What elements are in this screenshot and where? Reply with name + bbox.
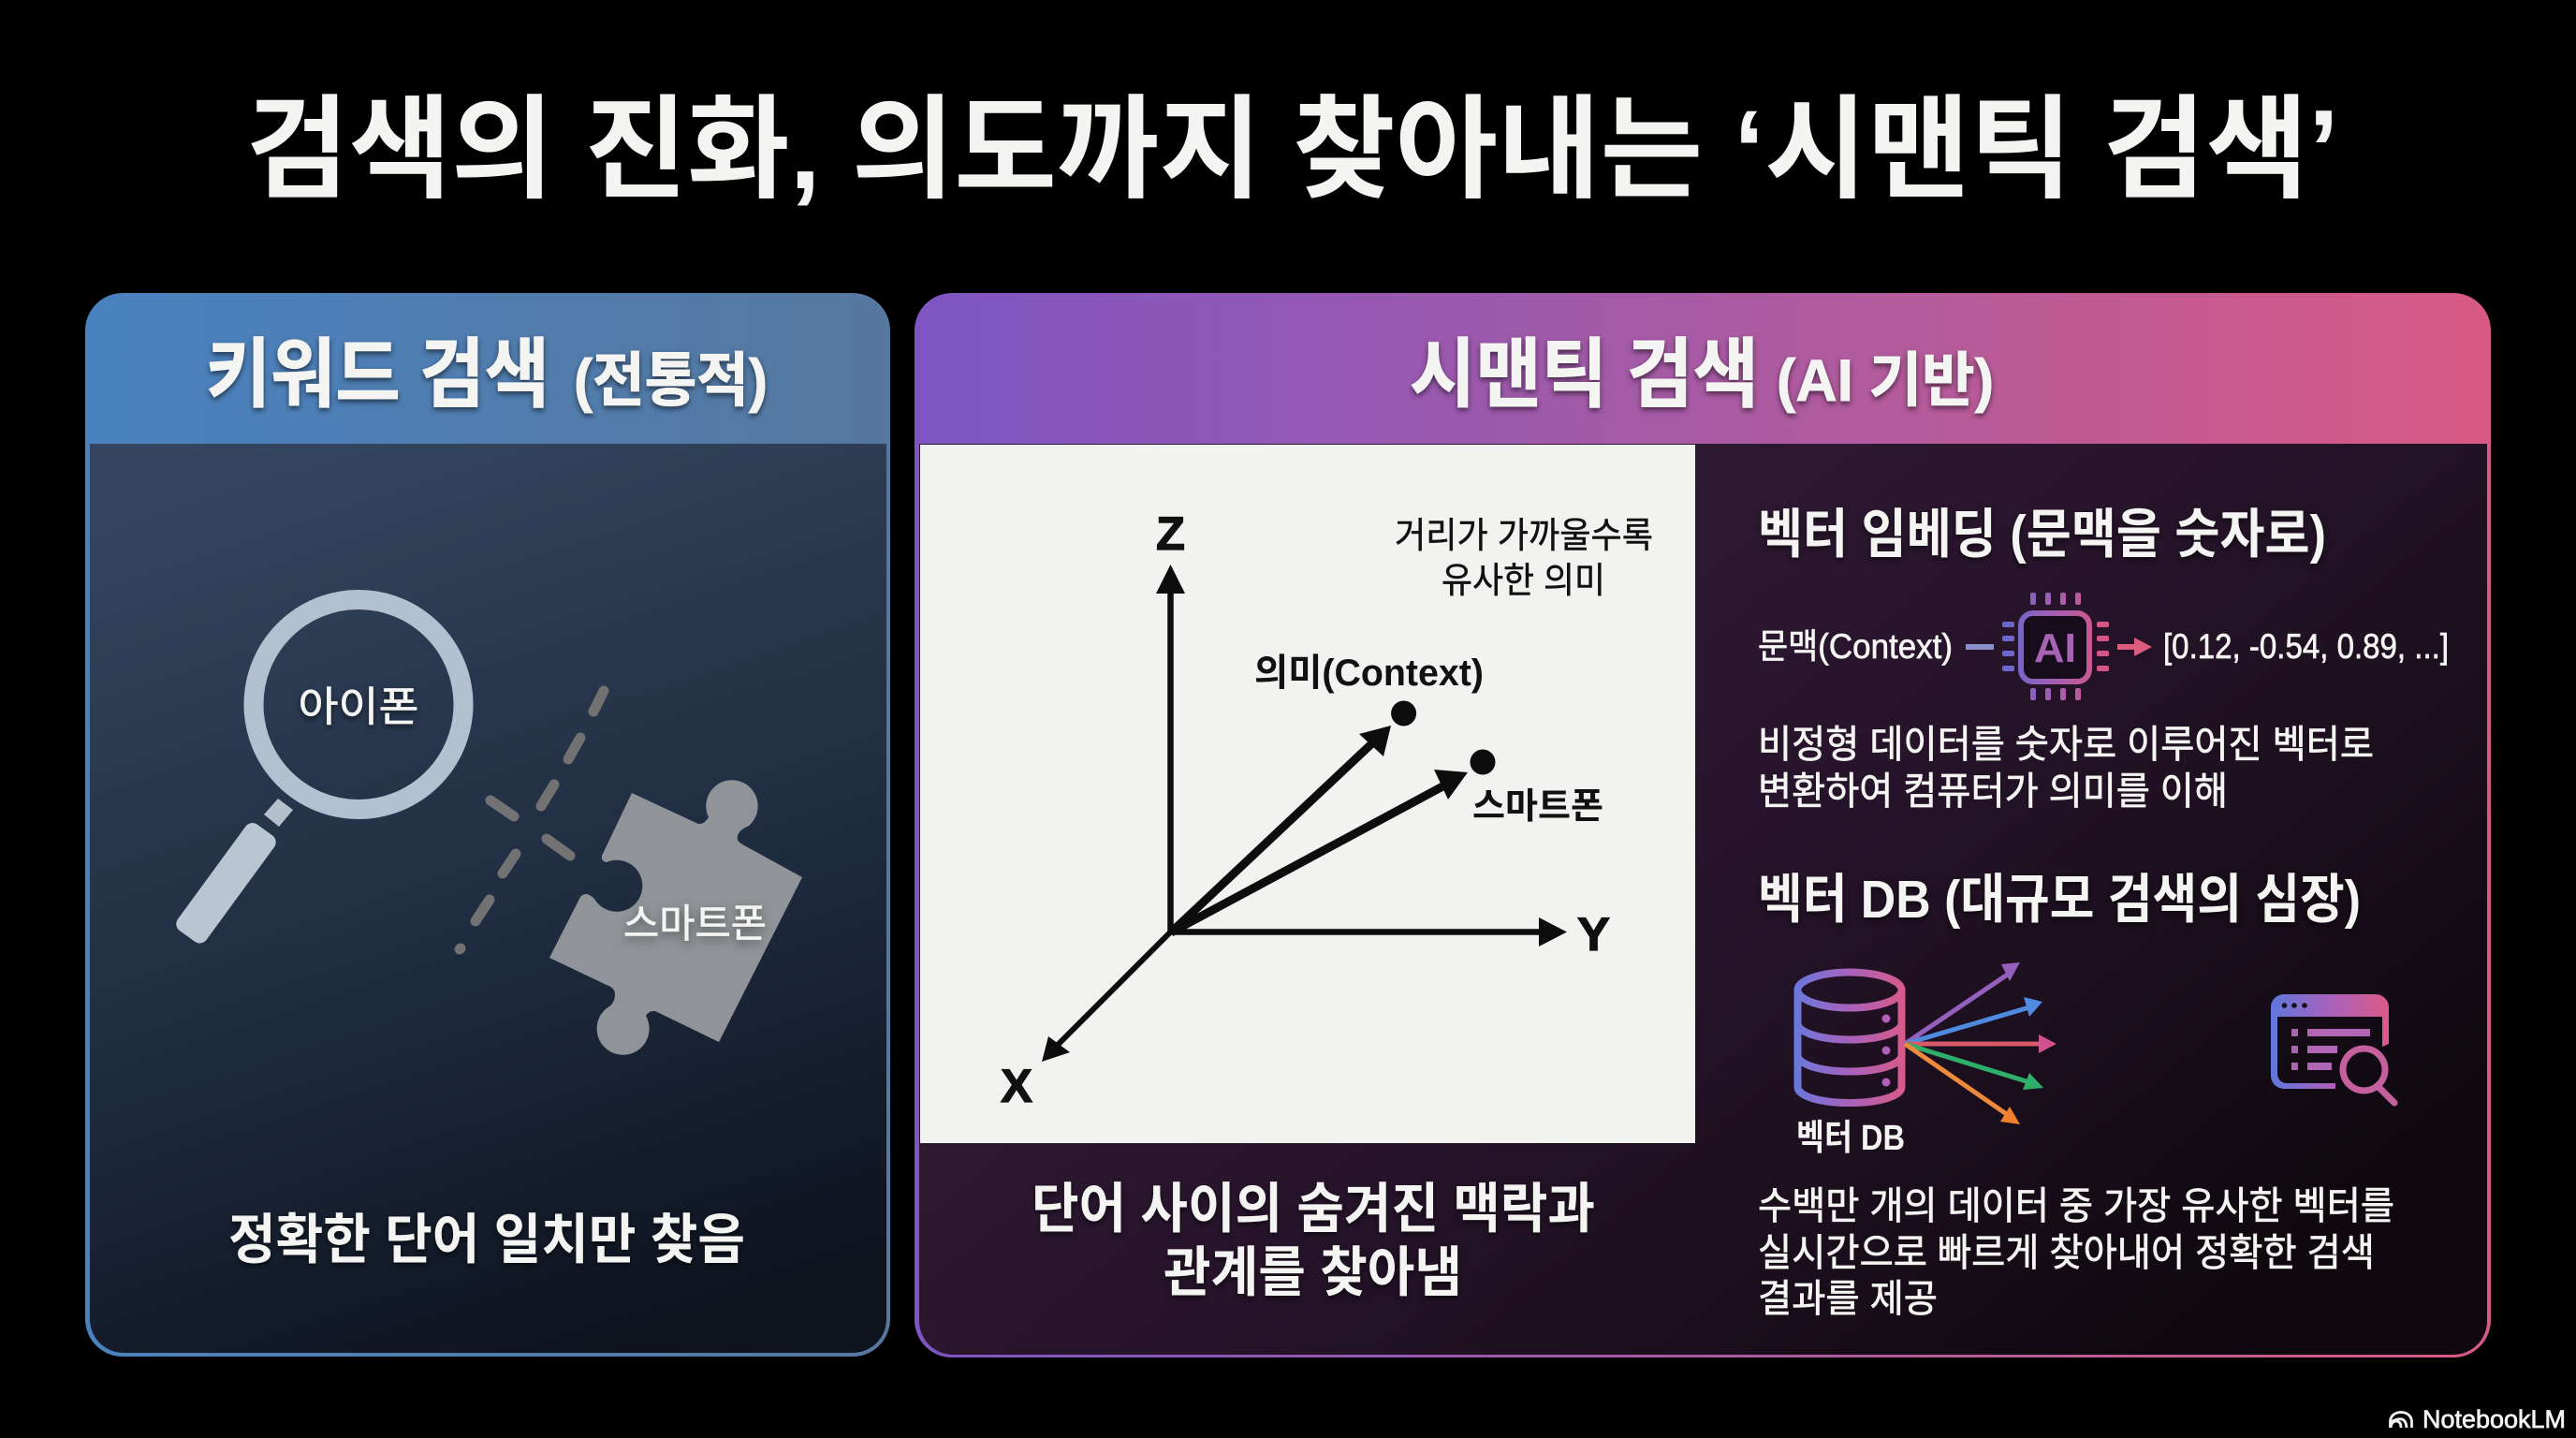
panel body [919,444,2487,1355]
embedding description: 변환하여 컴퓨터가 의미를 이해 [1758,770,2228,813]
axis: Y [1168,908,1610,961]
title: 검색의 진화, 의도까지 찾아내는 ‘시맨틱 검색’ [246,87,2339,213]
vector: smartphone [1171,749,1496,932]
chart note [1395,517,1653,601]
arrow [2117,638,2152,656]
embedding description: 비정형 데이터를 숫자로 이루어진 벡터로 [1758,723,2374,766]
vector: context [1171,700,1416,932]
input label: 문맥(Context) [1758,627,1953,666]
icon: search results window [2271,994,2394,1103]
watermark: NotebookLM: NotebookLM [2422,1405,2566,1433]
broken dashed link [460,691,604,949]
heading: vector embedding: 벡터 임베딩 (문맥을 숫자로) [1758,505,2326,565]
chart note: 거리가 가까울수록 [1395,517,1653,556]
chart caption [1032,1179,1595,1303]
database label: 벡터 DB [1796,1119,1905,1158]
heading qualifier: AI based: (AI 기반) [1777,348,1994,414]
panel body [90,444,886,1353]
vector DB description: 결과를 제공 [1758,1277,1938,1320]
puzzle keyword label: 스마트폰 [623,902,767,946]
heading qualifier: traditional: (전통적) [574,348,768,414]
embedding description [1758,723,2374,813]
vector DB description: 수백만 개의 데이터 중 가장 유사한 벡터를 [1758,1184,2394,1227]
axis: Z: Z [1156,507,1185,560]
chart note: 유사한 의미 [1442,562,1605,601]
axis: X [1001,932,1171,1112]
chart caption: 관계를 찾아냄 [1164,1242,1462,1303]
heading: keyword search: 키워드 검색 [206,333,549,418]
heading: vector DB: 벡터 DB (대규모 검색의 심장) [1758,870,2361,930]
icon: database [1797,972,1902,1103]
vector space chart [920,445,1695,1143]
icon: AI chip [2002,593,2109,700]
point label: smartphone: 스마트폰 [1472,787,1603,827]
axis: Z [1156,507,1185,934]
magnifier keyword label: 아이폰 [298,684,419,730]
axis: X: X [1001,1060,1032,1112]
output vector: [0.12, -0.54, 0.89, ...] [2163,627,2449,666]
panel: semantic search [915,293,2491,1357]
axis: Y: Y [1577,908,1610,961]
icon: puzzle piece [549,780,802,1055]
vector DB description: 실시간으로 빠르게 찾아내어 정확한 검색 [1758,1231,2375,1274]
icon: NotebookLM logo [2391,1412,2411,1428]
icon: AI chip: AI [2034,625,2076,671]
database indicator dots [1881,1015,1891,1086]
embedding flow [1758,593,2449,700]
vector arrows fan [1905,962,2056,1124]
point label: context: 의미(Context) [1254,653,1484,694]
caption: exact word match only: 정확한 단어 일치만 찾음 [228,1210,745,1270]
connector line [1966,644,1994,650]
panel frame and header band [915,293,2491,1357]
panel: keyword search [85,293,890,1357]
panel frame and header band [85,293,890,1357]
vector DB description [1758,1184,2394,1320]
icon: magnifying glass [184,599,463,934]
chart caption: 단어 사이의 숨겨진 맥락과 [1032,1179,1595,1240]
chart background [920,445,1695,1143]
heading: semantic search: 시맨틱 검색 [1410,333,1759,418]
